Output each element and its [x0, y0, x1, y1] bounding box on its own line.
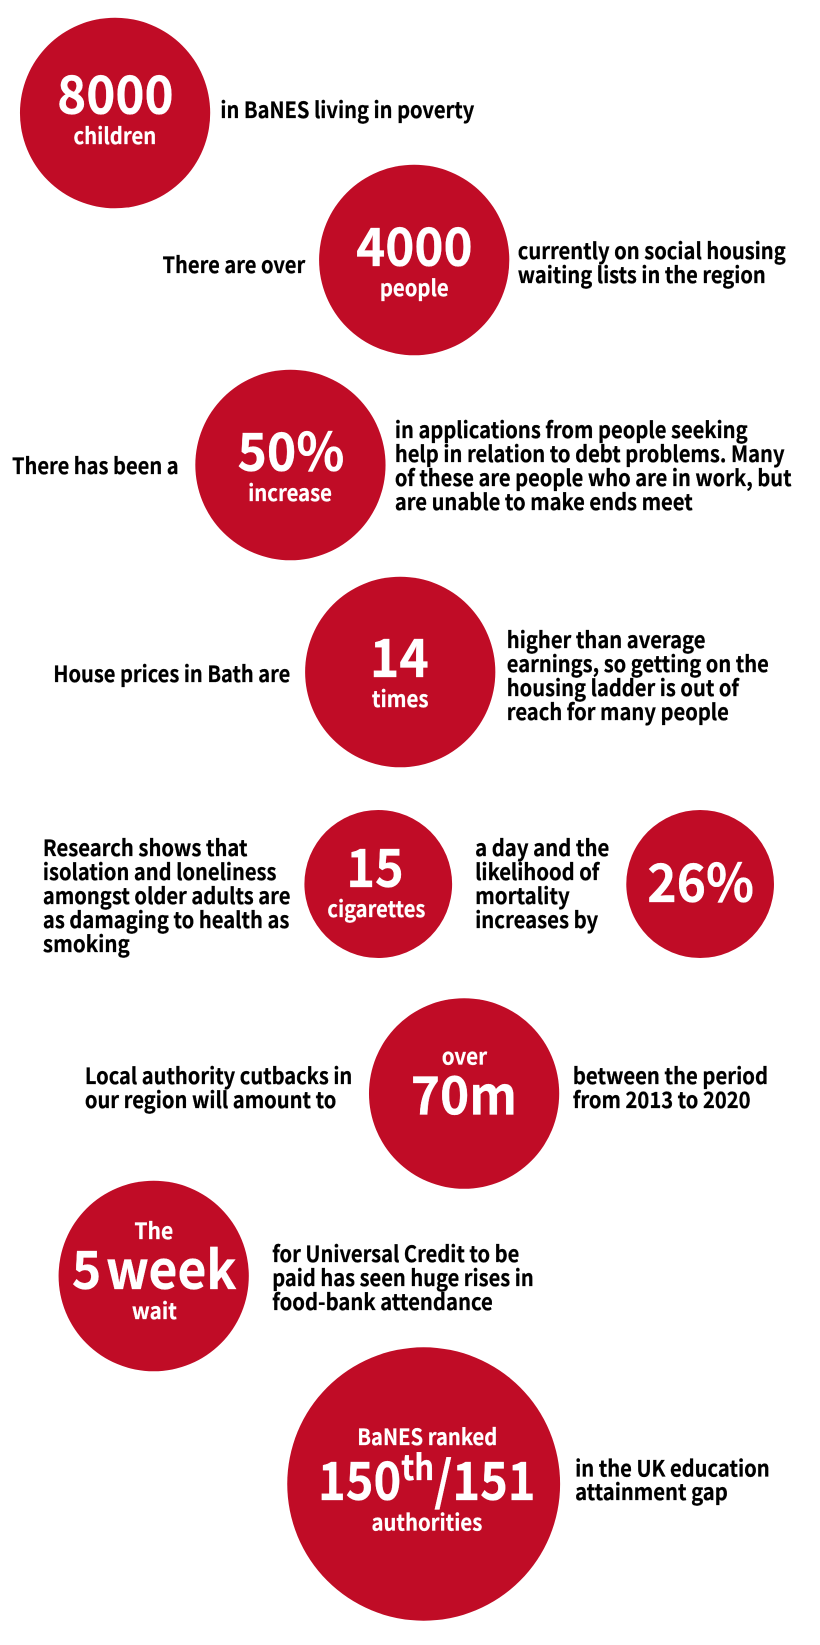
- circle: 50% increase: increase: [248, 476, 332, 508]
- text: higher than earnings: higher than average: [507, 623, 705, 655]
- panel: education ranking: [287, 1347, 770, 1621]
- text: mortality: mortality: [475, 879, 570, 911]
- text: period 2013 to 2020: between the period: [573, 1059, 768, 1091]
- circle: 4000 people: [319, 165, 509, 355]
- text: higher than earnings: housing ladder is out of: [507, 671, 740, 703]
- circle: BaNES ranked 150th/151: th: [401, 1440, 434, 1491]
- circle: 8000 children: children: [73, 119, 156, 151]
- panel: 8000 children: [20, 18, 474, 208]
- text: education attainment: [575, 1451, 770, 1507]
- circle: 4000 people: 4000: [356, 206, 473, 282]
- panel: 5 week wait: [59, 1181, 534, 1371]
- text: period 2013 to 2020: from 2013 to 2020: [573, 1083, 751, 1115]
- circle: 15 cigarettes: 15: [346, 827, 404, 903]
- text: research: smoking: [43, 927, 130, 959]
- text: there has been a: There has been a: [12, 449, 179, 481]
- text: debt applications: are unable to make ends meet: [395, 485, 693, 517]
- circle: 50% increase: 50%: [238, 411, 344, 487]
- text: research: Research shows that: [43, 831, 248, 863]
- circle: over 70m: [369, 998, 559, 1189]
- text: higher than earnings: reach for many people: [507, 695, 729, 727]
- circle: the 5 week wait: 5 week: [72, 1229, 237, 1305]
- text: debt applications: in applications from people seeking: [395, 413, 748, 445]
- circle: 50% increase: [195, 370, 386, 560]
- circle: 8000 children: 8000: [57, 54, 174, 130]
- circle: 15 cigarettes: [304, 810, 452, 958]
- circle: the 5 week wait: The: [134, 1214, 173, 1246]
- circle: 14 times: times: [372, 682, 429, 714]
- text: education attainment: attainment gap: [575, 1475, 728, 1507]
- circle: 14 times: 14: [370, 617, 429, 693]
- circle: 8000 children: [20, 18, 210, 208]
- circle: 15 cigarettes: cigarettes: [327, 892, 425, 924]
- text: poverty: in BaNES living in poverty: [220, 93, 474, 125]
- text: mortality: a day and the: [475, 831, 609, 863]
- circle: BaNES ranked 150th/151: [287, 1347, 560, 1621]
- text: social housing: currently on social housing: [518, 234, 786, 266]
- text: education attainment: in the UK education: [575, 1451, 770, 1484]
- panel: 4000 people: [162, 165, 786, 355]
- text: research: amongst older adults are: [43, 879, 290, 911]
- circle: 26%: 26%: [647, 842, 754, 918]
- text: research: isolation and loneliness: [43, 855, 276, 887]
- text: higher than earnings: earnings, so getting on the: [507, 647, 769, 679]
- panel: loneliness and smoking: [43, 810, 774, 959]
- panel: 50% increase: [12, 370, 792, 560]
- text: mortality: [475, 831, 609, 935]
- circle: 26%: [626, 810, 774, 958]
- circle: BaNES ranked 150th/151: 150: [318, 1440, 412, 1516]
- text: house prices: House prices in Bath are: [53, 657, 290, 689]
- text: debt applications: help in relation to debt problems. Many: [395, 437, 785, 469]
- text: mortality: increases by: [475, 903, 598, 935]
- text: universal credit: for Universal Credit to be: [272, 1237, 519, 1269]
- panel: 14 times: [53, 577, 769, 767]
- circle: over 70m: 70m: [411, 1054, 517, 1131]
- text: debt applications: [395, 413, 792, 517]
- circle: BaNES ranked 150th/151: authorities: [371, 1505, 482, 1537]
- circle: BaNES ranked 150th/151: BaNES ranked: [357, 1420, 497, 1452]
- text: universal credit: food-bank attendance: [272, 1285, 493, 1317]
- circle: BaNES ranked 150th/151: /151: [434, 1440, 536, 1516]
- text: social housing: waiting lists in the region: [518, 258, 766, 290]
- text: local authority cutbacks: [85, 1059, 352, 1115]
- text: local authority cutbacks: our region will amount to: [85, 1083, 336, 1115]
- text: universal credit: paid has seen huge rises in: [272, 1261, 534, 1293]
- text: research: [43, 831, 290, 959]
- text: period 2013 to 2020: [573, 1059, 768, 1115]
- circle: the 5 week wait: [59, 1181, 249, 1371]
- text: research: as damaging to health as: [43, 903, 289, 935]
- text: social housing: [518, 234, 786, 290]
- text: there are over: There are over: [162, 248, 305, 280]
- circle: 14 times: [305, 577, 495, 767]
- circle: the 5 week wait: wait: [132, 1294, 177, 1326]
- text: local authority cutbacks: Local authority cutbacks in: [85, 1059, 352, 1091]
- text: higher than earnings: [507, 623, 769, 727]
- circle: 4000 people: people: [380, 271, 449, 303]
- panel: over 70m cutbacks: [85, 998, 768, 1189]
- text: universal credit: [272, 1237, 534, 1317]
- text: mortality: likelihood of: [475, 855, 601, 887]
- circle: over 70m: over: [442, 1039, 487, 1072]
